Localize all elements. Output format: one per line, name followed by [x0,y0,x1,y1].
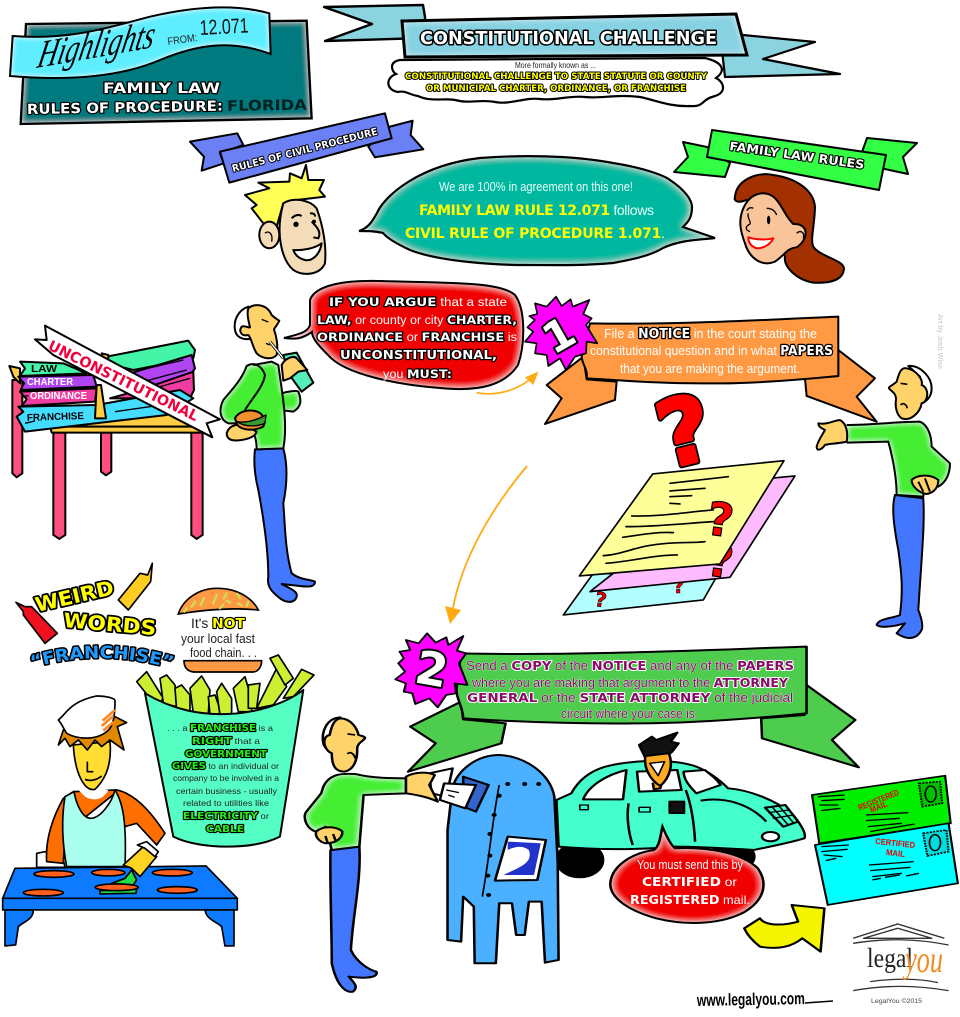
definition text: related to utilities like [183,798,269,808]
word legal: legal [867,943,913,973]
banner tail right [722,35,840,77]
hand [227,425,257,440]
more formally known as: More formally known as ... [515,60,596,70]
face [73,742,110,790]
banner tail left [324,5,425,41]
arrow: step 1 to step 2 [445,466,527,624]
hair [58,717,127,750]
step 2 text: Send a COPY of the NOTICE and any of the PAPERS [466,658,794,673]
panel: envelopes: MAIL [886,847,905,859]
small question mark cyan: ? [593,587,609,613]
question mark on yellow paper: ? [703,491,737,548]
bubble line 1: You must send this by [637,858,744,872]
definition text: GIVES to an individual or [172,761,279,772]
step 1 text line 2: constitutional question and in what PAPERS [590,343,833,359]
speech bubble: if you argue [284,281,523,389]
panel: rules of civil procedure character [190,113,423,274]
text line 3: food chain. . . [190,645,257,660]
subtitle rules of procedure: RULES OF PROCEDURE: [27,99,223,118]
icon: mustard bottle [118,563,152,610]
cloud text line 1: CONSTITUTIONAL CHALLENGE TO STATE STATUTE OR COUNTY [405,72,708,82]
icon: top bun [178,588,258,614]
griddle table [3,866,237,898]
icon: smiling woman [735,174,844,283]
bubble line 3: CIVIL RULE OF PROCEDURE 1.071. [405,225,665,242]
step 1 text line 1: File a NOTICE in the court stating the [604,326,817,342]
line 4: UNCONSTITUTIONAL, [340,348,497,362]
icon: blue mailbox [406,755,559,963]
line 1: IF YOU ARGUE that a state [329,295,507,309]
head [235,307,252,339]
panel: constitutional challenge banner [324,5,840,106]
left cuff [37,852,65,867]
shirt [220,362,300,449]
spatula and patty [100,870,137,894]
car body [556,761,805,850]
hand [406,773,438,802]
icon: starburst 2 [395,633,467,707]
cyan paper [563,573,717,615]
trousers [877,495,924,638]
illustration: stacked papers [563,461,795,615]
ribbon text: RULES OF CIVIL PROCEDURE [231,127,379,175]
car details [628,790,766,845]
cloud [388,58,723,106]
text line 1: It's NOT [191,616,246,632]
icon: smiling blond man [245,165,325,274]
fries cup [145,690,303,847]
red bubble shape [284,281,523,389]
word franchise: “FRANCHISE” [30,644,176,667]
table with legs [9,366,203,539]
text registered mail: REGISTERED [857,787,900,813]
line 5: you MUST: [383,367,452,381]
panel: envelopes: MAIL [868,799,889,815]
bubble line 3: REGISTERED mail. [630,893,750,907]
panel: unconstitutional table: FRANCHISE [27,411,84,424]
step 2 text: GENERAL or the STATE ATTORNEY of the judicial [467,690,793,705]
arrow: yellow curved [744,905,824,952]
definition text: ELECTRICITY or [183,811,269,822]
shirt [305,774,406,850]
figure: man with soda and burger [220,305,315,602]
burger [235,411,265,430]
panel: step 2 send a copy [395,633,859,772]
green banner [408,647,859,772]
yellow paper [579,461,784,576]
speech bubble: agreement [359,156,715,265]
script word Highlights: Highlights [33,12,160,77]
paper hat [58,696,115,738]
logo: legalyou [853,924,949,1005]
wheels [556,843,603,877]
icon: big question mark: ? [646,374,724,490]
unconstitutional ribbon [35,326,220,437]
panel: weird words [15,562,176,667]
driver [639,733,679,758]
ribbon text: FAMILY LAW RULES [729,139,865,172]
panel: family law rules character [674,130,917,283]
bubble shape [610,827,763,923]
green registered envelope [812,776,951,843]
word words: WORDS [63,608,157,640]
orange shirt [46,790,165,863]
word weird: WEIRD [33,575,116,617]
panel: unconstitutional table: CHARTER [27,377,74,388]
step number 2: 2 [411,640,452,699]
icon: fries [137,655,314,715]
letters [429,768,453,797]
arrow: bubble to step 1 [477,372,538,394]
trousers [330,847,377,992]
artist credit: Art by Josh Wise [936,314,945,369]
head [323,717,340,753]
figure: burger cook at griddle [3,696,237,946]
panel: unconstitutional table [9,326,220,539]
subtitle family law: FAMILY LAW [103,81,220,97]
bubble line 2: FAMILY LAW RULE 12.071 follows [419,202,654,219]
rule number: 12.071 [199,14,249,40]
panel: unconstitutional table: ORDINANCE [30,391,87,402]
title background [21,21,312,124]
panel: fries box with franchise definition [137,655,314,847]
ribbon: rules of civil procedure [190,113,423,183]
mail slot [463,777,489,812]
definition text: certain business - usually [176,786,278,796]
ribbon: family law rules [674,142,730,177]
text certified mail: CERTIFIED [875,836,916,850]
bubble line 1: We are 100% in agreement on this one! [439,179,633,194]
figure: man mailing letter [305,717,406,992]
panel: envelopes [812,776,958,905]
head [908,366,932,403]
step 2 text [466,658,794,721]
bubble line 2: CERTIFIED or [642,875,737,889]
glove and cuff [123,847,157,877]
speech bubble: certified or registered [610,827,763,923]
pink paper [590,476,795,592]
definition text: CABLE [206,824,244,835]
fist [912,476,938,494]
panel: not your local fast food chain [178,588,262,672]
mailbox body [448,755,559,963]
question mark on pink paper: ? [703,532,737,589]
apron [63,790,125,867]
step number 1: 1 [534,307,584,364]
step 2 text: where you are making that argument to the ATTORNEY [471,675,789,690]
icon: bottom bun [184,661,262,672]
panel: step 1 notice [525,297,877,424]
logo roof [853,924,949,991]
word you: you [902,939,943,981]
trousers [254,448,315,602]
shirt [847,422,950,497]
icon: car with driver [556,733,805,877]
panel: highlights title [10,7,312,124]
icon: ketchup bottle [16,602,57,643]
subtitle florida: FLORIDA [227,98,308,115]
figure: man pointing at papers [817,366,950,638]
line 3: ORDINANCE or FRANCHISE is [317,330,517,344]
icon: starburst 1 [525,297,597,370]
from label: FROM: [167,32,198,48]
cyan certified envelope [815,823,958,905]
neck [78,788,108,799]
small question mark under pink: ? [673,574,685,598]
main heading: CONSTITUTIONAL CHALLENGE [420,28,717,49]
definition text: RIGHT that a [192,736,260,747]
hand [817,420,847,450]
definition text: . . . a FRANCHISE is a [167,723,273,734]
website url: www.legalyou.com [696,989,805,1010]
definition text: GOVERNMENT [185,749,268,760]
line 2: LAW, or county or city CHARTER, [317,313,517,327]
orange banner [545,317,877,424]
step 1 text line 3: that you are making the argument. [620,361,800,376]
document stacks [17,341,195,432]
definition text: company to be involved in a [173,773,279,783]
ribbon text: UNCONSTITUTIONAL [45,338,201,425]
step 2 text: circuit where your case is. [561,707,698,721]
cloud text line 2: OR MUNICIPAL CHARTER, ORDINANCE, OR FRANCHISE [426,84,686,94]
car windows [583,770,721,799]
banner main [402,14,747,57]
icon: big question mark: ? [646,374,724,490]
definition text [167,723,279,835]
rivets [485,782,541,897]
bubble shape [359,156,715,265]
postal emblem [495,837,546,881]
text line 2: your local fast [181,631,255,646]
copyright: LegalYou ©2015 [871,997,922,1005]
document labels: LAW [31,363,57,375]
highlights ribbon [10,7,271,78]
fist [316,827,342,843]
soda cup and straw [270,342,283,358]
patties [23,869,197,896]
